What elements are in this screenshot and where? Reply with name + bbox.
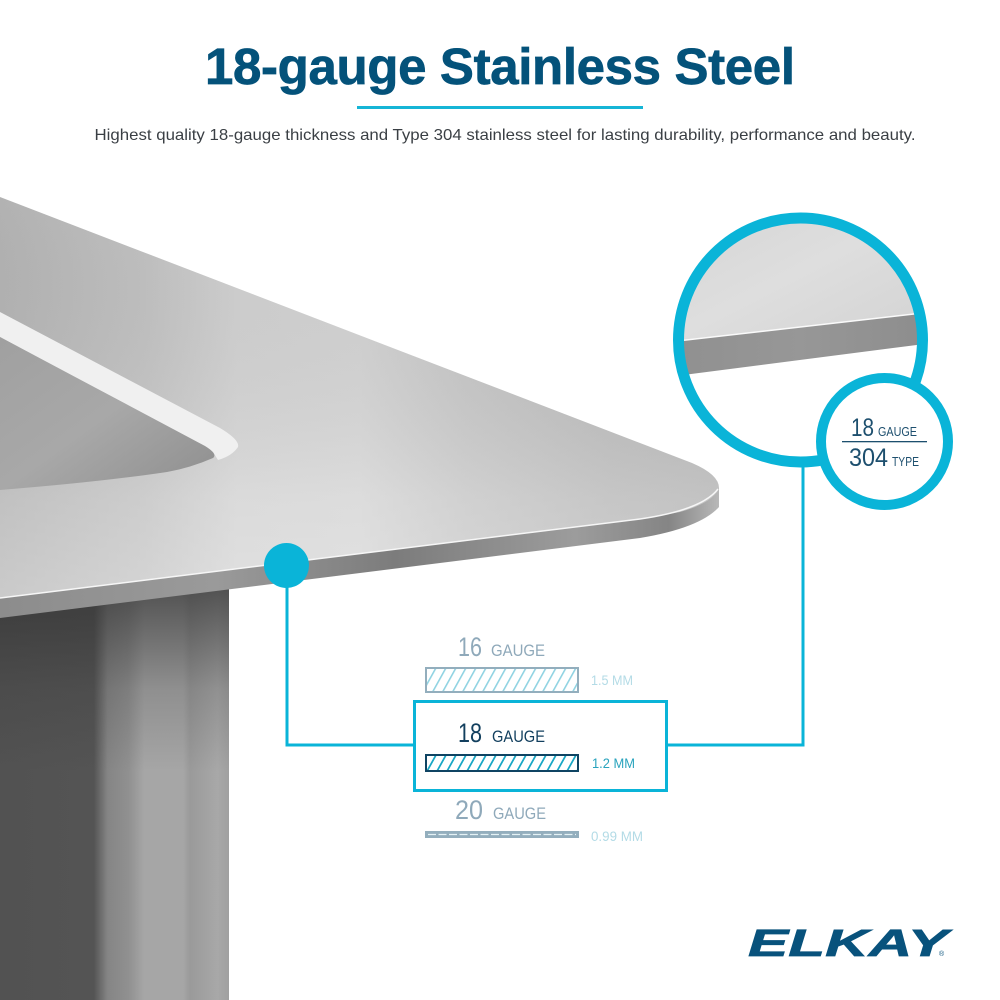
- 18 gauge option: 1.2 MM: [592, 756, 635, 771]
- sink basin: [0, 337, 214, 490]
- title: 18-gauge Stainless Steel: [205, 38, 795, 95]
- badge 304: 304: [849, 444, 888, 472]
- zoomed plate edge: [684, 314, 917, 374]
- sink leg: [0, 585, 229, 1000]
- 18 gauge option: [426, 718, 635, 771]
- 20 gauge option: [426, 795, 643, 844]
- 20 gauge option: 0.99 MM: [591, 829, 643, 844]
- zoomed plate surface: [684, 224, 914, 340]
- big circle ring: [678, 218, 922, 462]
- zoom circle: [673, 212, 928, 468]
- 16 gauge option: 16: [458, 632, 482, 662]
- logo: ®: [939, 950, 945, 958]
- plate front edge: [0, 488, 719, 618]
- badge type: TYPE: [892, 454, 919, 469]
- badge circle: [821, 378, 948, 505]
- badge divider: [842, 441, 927, 442]
- plate top surface: [0, 197, 719, 598]
- sink photo: [0, 197, 719, 1000]
- 16 gauge option: GAUGE: [491, 641, 545, 660]
- 18 gauge option: GAUGE: [492, 727, 545, 746]
- 16 gauge option: [426, 632, 633, 692]
- zoomed edge highlight: [684, 313, 914, 341]
- 20 gauge option: 20: [455, 795, 483, 825]
- plate highlight edge: [0, 489, 718, 598]
- 18 gauge option: 18: [458, 718, 482, 748]
- callout dot: [264, 543, 309, 588]
- badge gauge: GAUGE: [878, 424, 917, 439]
- title underline: [357, 106, 643, 109]
- sink rim: [0, 312, 238, 460]
- logo: [748, 923, 954, 965]
- logo: ELKAY: [748, 923, 954, 965]
- 20 gauge option: GAUGE: [493, 804, 546, 823]
- subtitle: Highest quality 18-gauge thickness and Type 304 stainless steel for lasting durability, performance and beauty.: [94, 127, 916, 144]
- 16 gauge option: 1.5 MM: [591, 673, 633, 688]
- badge 18: 18: [851, 414, 874, 442]
- gauge box: [414, 702, 666, 790]
- connector lines: [287, 466, 803, 745]
